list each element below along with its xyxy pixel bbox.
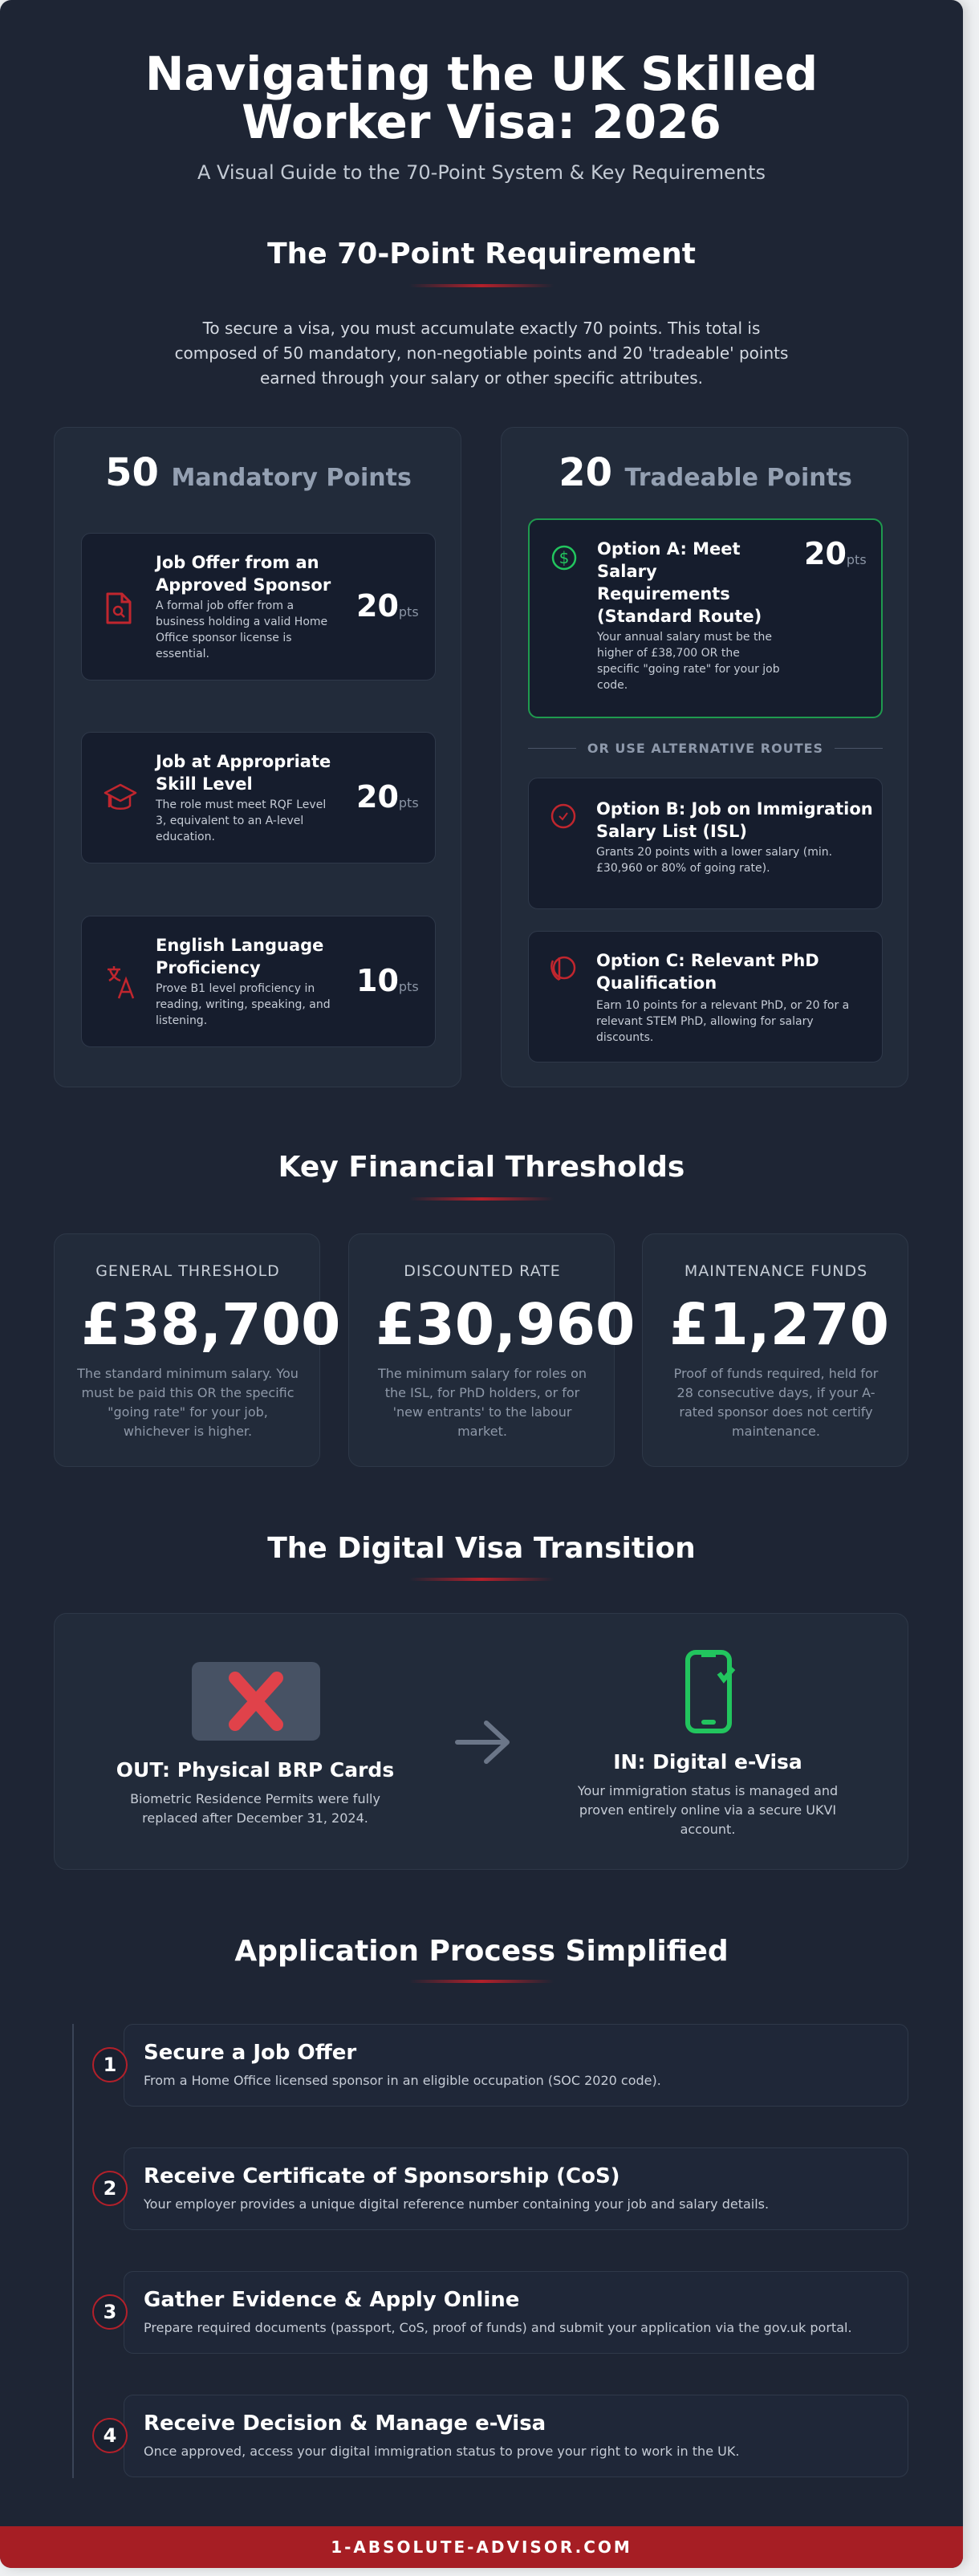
out text: Biometric Residence Permits were fully (130, 1791, 380, 1806)
step 3 number (92, 2294, 128, 2330)
heading: digital visa: The Digital Visa Transition (267, 1532, 696, 1565)
card: option C (528, 931, 883, 1062)
title (145, 47, 818, 149)
points: 20pts (356, 588, 419, 624)
card: maintenance funds: £1,270 (669, 1291, 889, 1358)
panel: digital transition (54, 1613, 908, 1870)
icon: document search (106, 592, 132, 624)
step 1 (124, 2024, 908, 2107)
out text: replaced after December 31, 2024. (142, 1810, 368, 1826)
step 2 number: 2 (104, 2177, 116, 2200)
in text: IN: Digital e-Visa (613, 1750, 802, 1774)
step 1: Secure a Job Offer (144, 2041, 356, 2065)
card: job offer (81, 533, 436, 681)
card: english language: 10pts (356, 963, 419, 998)
out text (116, 1758, 394, 1826)
card: option B: Option B: Job on Immigration Salary List (ISL) (596, 799, 873, 841)
card: english language (81, 916, 436, 1047)
card: option B: Grants 20 points with a lower salary (min. £30,960 or 80% of going rate). (596, 846, 832, 875)
card: discounted rate: DISCOUNTED RATE (404, 1262, 561, 1280)
step 1: From a Home Office licensed sponsor in an eligible occupation (SOC 2020 code). (144, 2073, 661, 2088)
card: skill level (81, 732, 436, 863)
step 4: Once approved, access your digital immigration status to prove your right to work in the UK. (144, 2444, 739, 2459)
step 4 number (92, 2418, 128, 2453)
arrow (455, 1721, 510, 1764)
icon: language (108, 966, 135, 998)
card: option A: 20pts (804, 536, 867, 571)
card: english language: Prove B1 level proficiency in reading, writing, speaking, and listening. (156, 982, 331, 1027)
footer: 1-ABSOLUTE-ADVISOR.COM (331, 2537, 632, 2557)
card: skill level: The role must meet RQF Level 3, equivalent to an A-level education. (156, 798, 326, 843)
divider: alternative routes: OR USE ALTERNATIVE ROUTES (587, 741, 823, 756)
card: general threshold (54, 1233, 320, 1467)
card: option A: Your annual salary must be the higher of £38,700 OR the specific "going rate" for your job code. (597, 631, 780, 692)
in text (578, 1750, 838, 1837)
step 2: Receive Certificate of Sponsorship (CoS) (144, 2164, 620, 2188)
panel: tradeable points (501, 427, 908, 1087)
title: Worker Visa: 2026 (242, 95, 721, 149)
card: general threshold: The standard minimum salary. You must be paid this OR the specific "going rate" for your job, whichever is higher. (77, 1366, 299, 1439)
card: skill level: Job at Appropriate Skill Level (156, 752, 331, 794)
footer (0, 2526, 963, 2568)
card: option A: Option A: Meet Salary Requirements (Standard Route) (597, 539, 762, 626)
step 2: Your employer provides a unique digital reference number containing your job and salary details. (144, 2196, 769, 2212)
out text: OUT: Physical BRP Cards (116, 1758, 394, 1782)
card: option C: Option C: Relevant PhD Qualification (596, 951, 819, 993)
icon: phone (685, 1650, 735, 1733)
step 3 (124, 2271, 908, 2354)
subtitle: A Visual Guide to the 70-Point System & Key Requirements (197, 161, 766, 184)
card: job offer: Job Offer from an Approved Sponsor (156, 553, 331, 595)
card: discounted rate: The minimum salary for roles on the ISL, for PhD holders, or for 'new entrants' to the labour market. (378, 1366, 587, 1439)
timeline (72, 2024, 74, 2478)
icon: BRP card crossed (192, 1662, 320, 1741)
panel heading: 50 Mandatory Points (105, 450, 412, 495)
step 3: Prepare required documents (passport, CoS, proof of funds) and submit your application via the gov.uk portal. (144, 2320, 852, 2335)
card: job offer: A formal job offer from a business holding a valid Home Office sponsor license is essential. (156, 599, 327, 660)
icon: dollar: $ (559, 548, 569, 567)
step 3: Gather Evidence & Apply Online (144, 2288, 519, 2312)
in text: Your immigration status is managed and proven entirely online via a secure UKVI account. (578, 1783, 838, 1837)
icon: check circle (550, 804, 576, 828)
card: maintenance funds (642, 1233, 908, 1467)
heading: 70-point requirement: The 70-Point Requirement (267, 238, 696, 270)
card: skill level: 20pts (356, 779, 419, 815)
icon: dollar (552, 546, 576, 570)
card: option A (528, 518, 883, 718)
step 4 number: 4 (104, 2424, 116, 2447)
step 1 number (92, 2047, 128, 2082)
step 1 number: 1 (104, 2054, 116, 2076)
step 2 number (92, 2171, 128, 2206)
icon: phd (550, 957, 576, 981)
panel heading: 20 Tradeable Points (559, 450, 852, 495)
step 4: Receive Decision & Manage e-Visa (144, 2411, 546, 2436)
icon: graduation cap (104, 783, 136, 810)
heading: application process: Application Process Simplified (234, 1935, 729, 1968)
step 4 (124, 2395, 908, 2477)
step 2 (124, 2147, 908, 2230)
card: english language: English Language Proficiency (156, 936, 323, 977)
intro paragraph: To secure a visa, you must accumulate exactly 70 points. This total is composed of 50 mandatory, non-negotiable points and 20 'tradeable' points earned through your salary or other specific attributes. (175, 319, 788, 388)
card: option B (528, 778, 883, 909)
panel: mandatory points (54, 427, 461, 1087)
card: maintenance funds: MAINTENANCE FUNDS (684, 1262, 867, 1280)
title: Navigating the UK Skilled (145, 47, 818, 101)
card: option C: Earn 10 points for a relevant PhD, or 20 for a relevant STEM PhD, allowing for salary discounts. (596, 999, 849, 1044)
card: discounted rate: £30,960 (376, 1291, 635, 1358)
card: discounted rate (348, 1233, 615, 1467)
step 3 number: 3 (104, 2301, 116, 2323)
card: maintenance funds: Proof of funds required, held for 28 consecutive days, if your A-rated sponsor does not certify maintenance. (674, 1366, 878, 1439)
card: general threshold: GENERAL THRESHOLD (95, 1262, 280, 1280)
heading: financial thresholds: Key Financial Thresholds (278, 1151, 684, 1184)
card: general threshold: £38,700 (81, 1291, 340, 1358)
